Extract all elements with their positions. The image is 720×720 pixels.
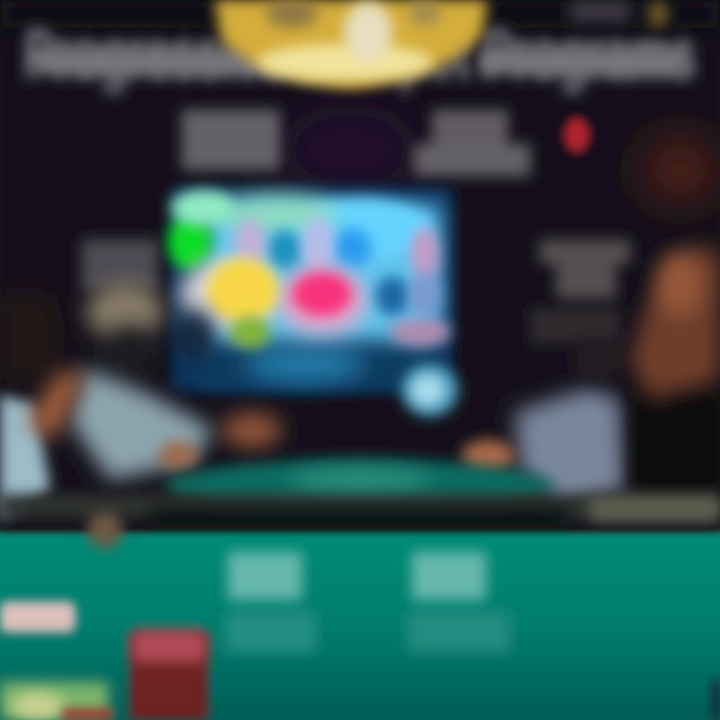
felt label right bbox=[408, 552, 510, 652]
player: left bbox=[0, 282, 282, 520]
poker table felt bbox=[0, 534, 720, 720]
dark corner object bbox=[712, 680, 720, 720]
pink tile bbox=[292, 272, 352, 316]
green tile bbox=[168, 214, 212, 270]
yellow tile bbox=[207, 258, 279, 322]
text block: top left bbox=[182, 110, 280, 170]
panel: colourful screen bbox=[168, 188, 452, 390]
player: right bbox=[462, 245, 720, 510]
felt label left bbox=[226, 552, 316, 652]
text block: top right bbox=[414, 110, 530, 176]
playing card bbox=[0, 602, 75, 632]
icon: gold jackpot badge bbox=[215, 0, 487, 88]
blue tiles bbox=[267, 230, 303, 270]
text block: mid right bbox=[530, 240, 630, 344]
small item on table edge bbox=[87, 512, 123, 548]
text block: mid left bbox=[82, 240, 158, 290]
icon: red dot bbox=[564, 117, 590, 153]
chip stack bbox=[130, 630, 208, 720]
side tiles bbox=[375, 276, 411, 316]
soft halo behind tiles bbox=[180, 259, 276, 331]
centre table bbox=[0, 460, 720, 528]
icon: glowing chip bbox=[402, 364, 458, 416]
bottom left card bbox=[0, 682, 112, 720]
